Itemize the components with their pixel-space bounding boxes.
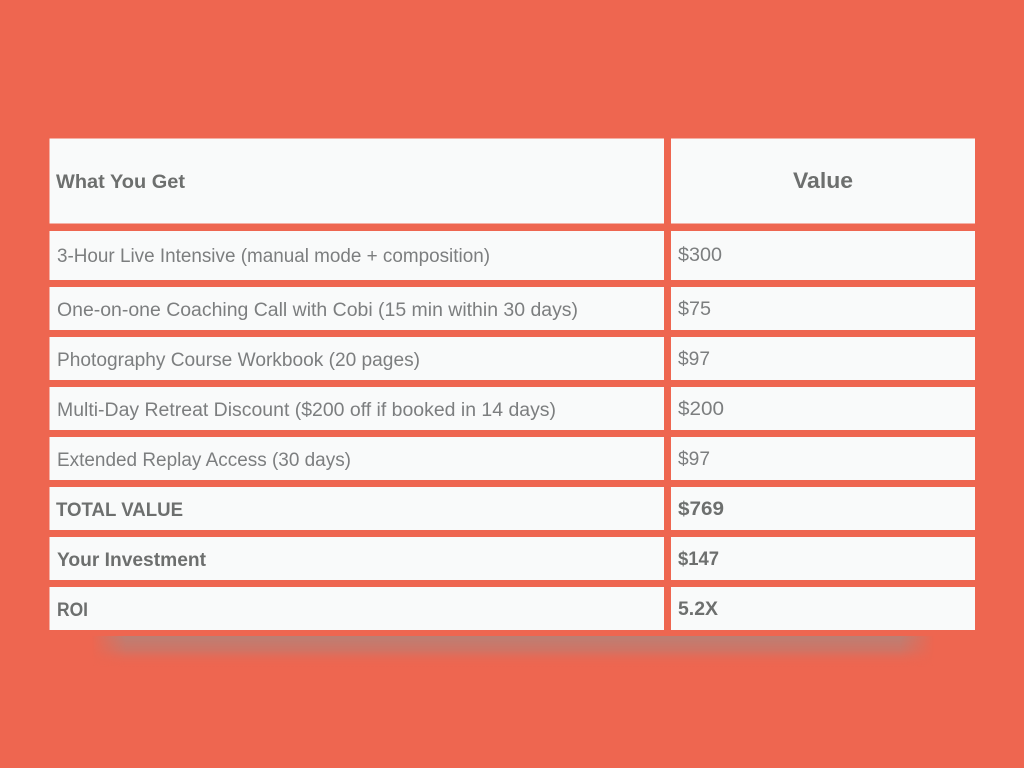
row: coaching call: One-on-one Coaching Call with Cobi (15 min within 30 days) (57, 300, 578, 321)
row: total value: $769 (678, 499, 724, 520)
row: workbook (50, 337, 975, 380)
row: retreat discount: Multi-Day Retreat Discount ($200 off if booked in 14 days) (57, 400, 556, 421)
row: roi: 5.2X (678, 599, 718, 620)
row: your investment: Your Investment (57, 550, 207, 571)
header: value: Value (793, 168, 853, 193)
row: workbook: $97 (678, 349, 710, 370)
row: replay access (50, 437, 975, 480)
row: your investment (50, 537, 975, 580)
value table infographic (50, 138, 975, 658)
row: coaching call: $75 (678, 299, 711, 320)
row: roi: ROI (57, 600, 88, 621)
header: what you get: What You Get (56, 172, 186, 193)
row: replay access: $97 (678, 449, 710, 470)
header row (50, 138, 975, 224)
row: live intensive: $300 (678, 245, 722, 266)
row: workbook: Photography Course Workbook (20 pages) (57, 350, 420, 371)
row: live intensive (50, 231, 975, 280)
row: live intensive: 3-Hour Live Intensive (manual mode + composition) (57, 246, 490, 267)
row: total value: TOTAL VALUE (56, 500, 183, 521)
row: coaching call (50, 287, 975, 330)
row: your investment: $147 (678, 549, 719, 570)
row: replay access: Extended Replay Access (30 days) (57, 450, 351, 471)
row: retreat discount: $200 (678, 399, 724, 420)
row: roi (50, 587, 975, 630)
row: retreat discount (50, 387, 975, 430)
table shadow (97, 636, 929, 658)
row: total value (50, 487, 975, 530)
